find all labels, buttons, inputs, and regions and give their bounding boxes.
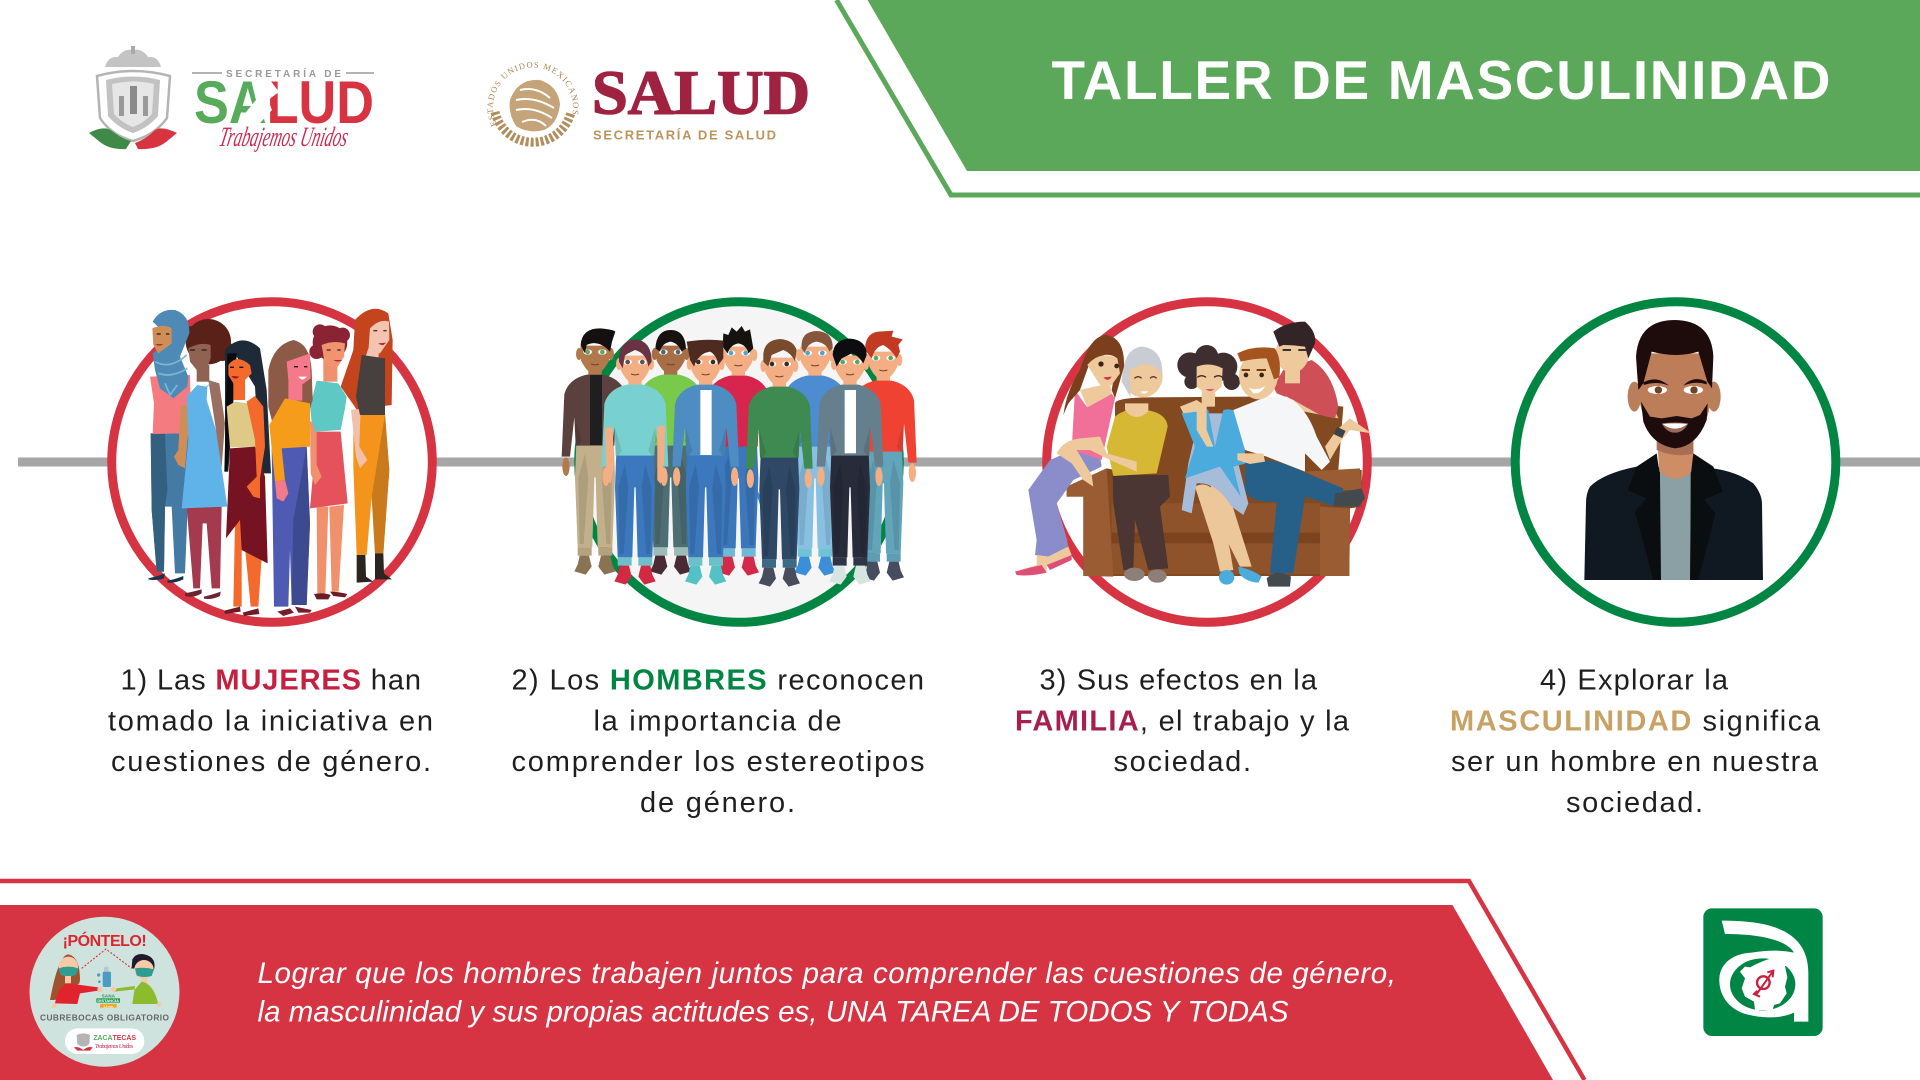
footer message: la masculinidad y sus propias actitudes es, UNA TAREA DE TODOS Y TODAS: [258, 996, 1289, 1028]
text: step 1: cuestiones de género.: [111, 746, 431, 778]
logo: Secretaría de Salud Zacatecas: [89, 46, 374, 153]
logo: Secretaría de Salud Zacatecas: SECRETARÍA DE: [226, 67, 341, 80]
illustration: family on a sofa: [1015, 322, 1372, 587]
text: step 1: [108, 664, 433, 778]
timeline line: [18, 458, 1920, 466]
text: step 1: 1) Las MUJERES han: [120, 664, 421, 696]
header banner: [836, 0, 1920, 195]
wordmark SALUD: SALUD: [592, 60, 810, 128]
text: step 2: 2) Los HOMBRES reconocen: [512, 664, 924, 696]
text: step 3: 3) Sus efectos en la: [1040, 664, 1318, 696]
text: step 4: ser un hombre en nuestra: [1451, 746, 1819, 778]
logo: Gobierno de México Salud: [487, 60, 810, 147]
text: step 2: de género.: [640, 787, 795, 819]
logo: a green emblem: [1703, 908, 1823, 1036]
badge heading: ¡PÓNTELO!: [63, 931, 147, 950]
badge caption: CUBREBOCAS OBLIGATORIO: [40, 1012, 170, 1022]
text: step 4: sociedad.: [1566, 787, 1703, 819]
icon: Zacatecas coat of arms: [89, 46, 177, 149]
badge illustration: DISTANCIA: [97, 998, 119, 1003]
icon: national seal: ESTADOS UNIDOS MEXICANOS: [487, 62, 578, 127]
circle: [1515, 302, 1836, 622]
badge illustration: [40, 931, 170, 1054]
badge illustration: Trabajemos Unidos: [95, 1044, 134, 1050]
circle: [112, 302, 432, 622]
panel: mujeres: [112, 302, 432, 622]
text: step 3: [1015, 664, 1350, 778]
logo: Secretaría de Salud Zacatecas: Trabajemos Unidos: [217, 122, 351, 153]
footer message: Lograr que los hombres trabajen juntos para comprender las cuestiones de género,: [258, 957, 1396, 990]
badge illustration: 1.5 mts: [103, 1004, 114, 1008]
text: step 4: 4) Explorar la: [1540, 664, 1729, 696]
panel: masculinidad: [1515, 302, 1836, 622]
panel: hombres: [562, 302, 917, 622]
circle: [579, 302, 899, 622]
illustration: group of women: [148, 309, 393, 616]
circle: [1047, 302, 1367, 622]
text: step 3: FAMILIA, el trabajo y la: [1015, 706, 1350, 738]
footer message: [258, 957, 1396, 1028]
wordmark SALUD: SALUD: [194, 69, 374, 136]
illustration: group of men: [562, 326, 917, 587]
badge: cubrebocas obligatorio: [30, 917, 180, 1067]
illustration: bearded man portrait: [1584, 320, 1763, 580]
text: step 4: MASCULINIDAD significa: [1450, 706, 1821, 738]
text: step 2: comprender los estereotipos: [512, 746, 924, 778]
text: step 1: tomado la iniciativa en: [108, 706, 433, 738]
text: step 4: [1450, 664, 1821, 819]
logo: Gobierno de México Salud: SECRETARÍA DE SALUD: [593, 128, 776, 142]
text: step 2: [512, 664, 924, 819]
badge illustration: ZACATECAS: [93, 1035, 136, 1042]
panel: familia: [1015, 302, 1372, 622]
text: step 3: sociedad.: [1114, 746, 1251, 778]
text: step 2: la importancia de: [594, 706, 842, 738]
badge illustration: SANA: [102, 994, 116, 999]
title: TALLER DE MASCULINIDAD: [1052, 49, 1830, 111]
footer banner: [0, 881, 1584, 1080]
